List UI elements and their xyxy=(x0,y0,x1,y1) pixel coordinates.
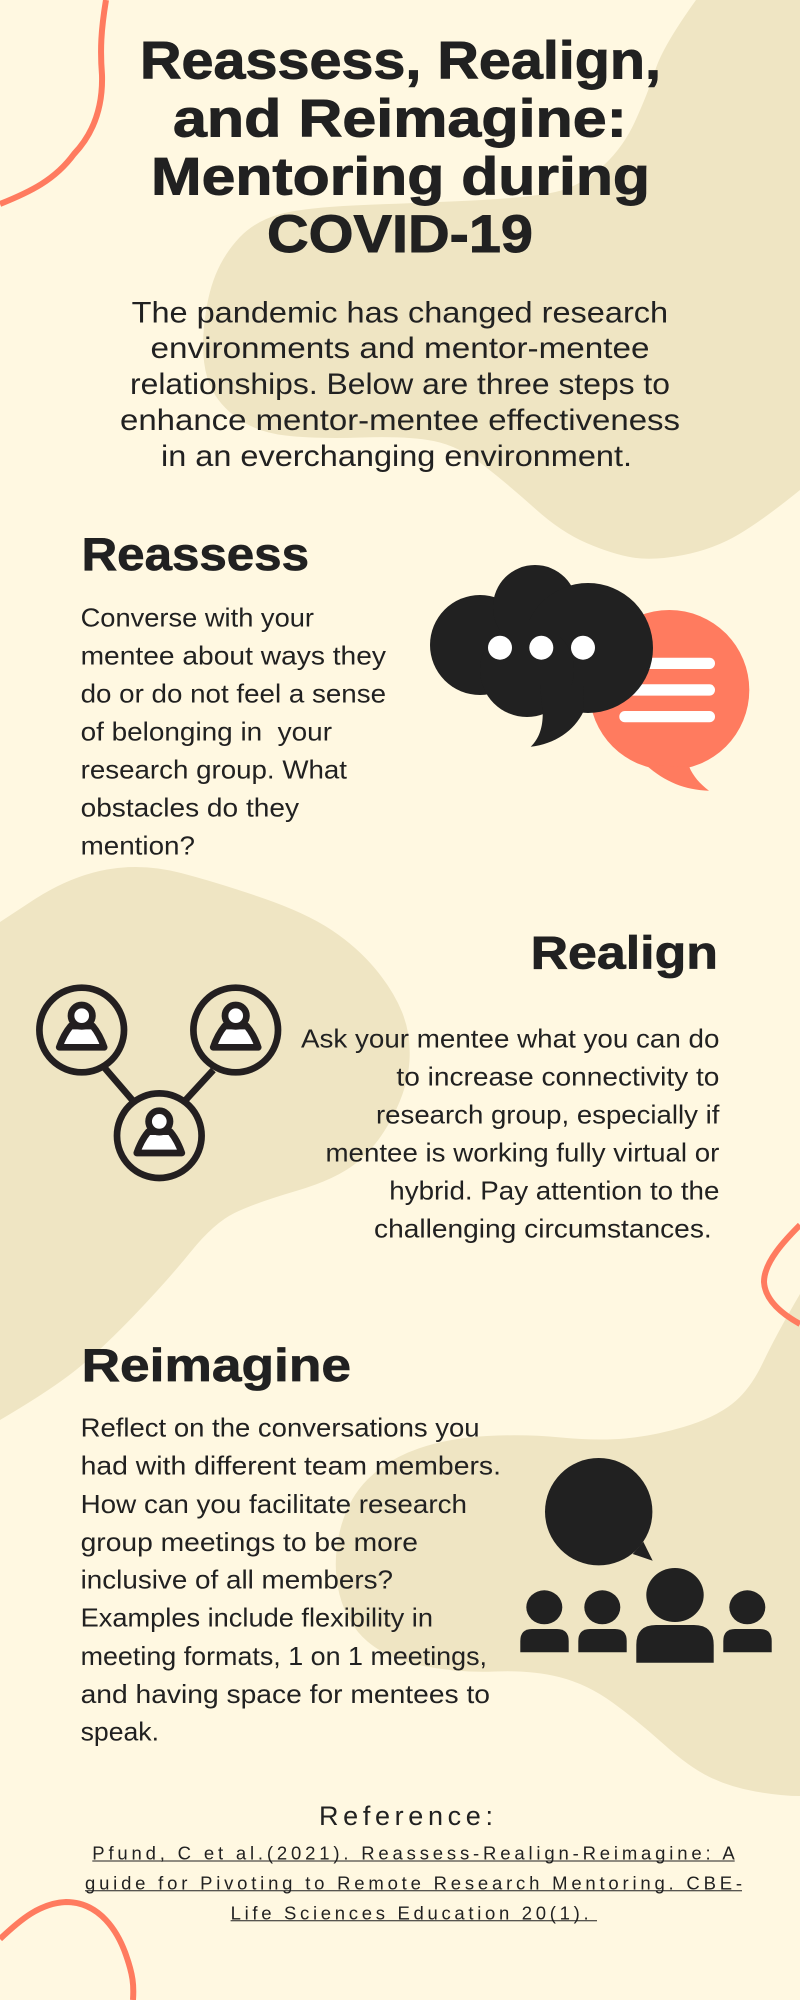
text block: reimagine: Examples include flexibility in xyxy=(81,1603,433,1633)
intro text: in an everchanging environment. xyxy=(161,440,632,473)
reference citation: guide for Pivoting to Remote Research Mentoring. CBE- xyxy=(85,1872,742,1893)
icon: person two xyxy=(578,1590,627,1652)
intro text: environments and mentor-mentee xyxy=(150,332,650,365)
icon: person right xyxy=(193,988,278,1072)
panel: reassess xyxy=(81,528,749,860)
icon: person four xyxy=(723,1590,772,1652)
text block: reassess: do or do not feel a sense xyxy=(81,679,386,709)
text block: realign: to increase connectivity to xyxy=(396,1062,719,1092)
title xyxy=(140,32,661,264)
icon: group with speech bubble xyxy=(520,1458,772,1663)
icon: person bottom xyxy=(117,1093,202,1178)
title: Mentoring during xyxy=(151,148,650,207)
panel: reimagine xyxy=(81,1339,772,1746)
heading: reassess: Reassess xyxy=(82,528,309,580)
text block: reimagine: had with different team members. xyxy=(81,1451,501,1481)
text block: realign: hybrid. Pay attention to the xyxy=(389,1176,719,1206)
text block: reassess: mentee about ways they xyxy=(81,640,386,670)
text block: realign: challenging circumstances. xyxy=(374,1213,712,1243)
text block: reimagine: Reflect on the conversations you xyxy=(81,1413,480,1443)
reference citation: Life Sciences Education 20(1). xyxy=(231,1902,589,1923)
text block: reassess: mention? xyxy=(81,830,195,860)
reference heading: Reference: xyxy=(319,1801,493,1831)
title: Reassess, Realign, xyxy=(140,32,661,91)
text block: reassess: of belonging in your xyxy=(81,716,332,746)
icon: speech bubble xyxy=(545,1458,653,1565)
heading: realign: Realign xyxy=(531,926,718,978)
text block: reassess xyxy=(81,603,386,860)
reference citation: Pfund, C et al.(2021). Reassess-Realign-Reimagine: A xyxy=(92,1842,735,1863)
title: COVID-19 xyxy=(267,205,533,264)
icon: connected people network xyxy=(39,988,278,1178)
text block: reimagine: inclusive of all members? xyxy=(81,1564,393,1594)
icon: dark cloud speech bubble xyxy=(430,565,653,747)
icon: person left xyxy=(39,988,124,1072)
intro text: relationships. Below are three steps to xyxy=(130,368,670,401)
text block: reimagine: and having space for mentees to xyxy=(81,1679,490,1709)
icon: person large xyxy=(636,1568,714,1663)
text block: reassess: Converse with your xyxy=(81,603,314,633)
text block: reimagine: meeting formats, 1 on 1 meetings, xyxy=(81,1641,487,1671)
heading: reimagine: Reimagine xyxy=(82,1339,351,1391)
intro text xyxy=(120,296,680,473)
text block: realign: Ask your mentee what you can do xyxy=(301,1023,719,1053)
text block: realign xyxy=(301,1023,720,1243)
intro text: enhance mentor-mentee effectiveness xyxy=(120,404,680,437)
reference citation xyxy=(85,1842,742,1923)
intro text: The pandemic has changed research xyxy=(132,296,668,330)
icon: speech bubbles xyxy=(430,565,749,791)
title: and Reimagine: xyxy=(173,89,627,148)
panel: realign xyxy=(39,926,720,1243)
text block: reimagine: group meetings to be more xyxy=(81,1527,418,1557)
icon: person one xyxy=(520,1590,569,1652)
text block: reimagine: How can you facilitate research xyxy=(81,1489,467,1519)
text block: reimagine xyxy=(81,1413,501,1746)
text block: reassess: research group. What xyxy=(81,754,348,784)
text block: realign: mentee is working fully virtual or xyxy=(326,1137,720,1167)
icon: coral speech bubble xyxy=(589,610,749,791)
text block: reimagine: speak. xyxy=(81,1716,159,1746)
text block: realign: research group, especially if xyxy=(376,1100,720,1130)
text block: reassess: obstacles do they xyxy=(81,793,299,823)
